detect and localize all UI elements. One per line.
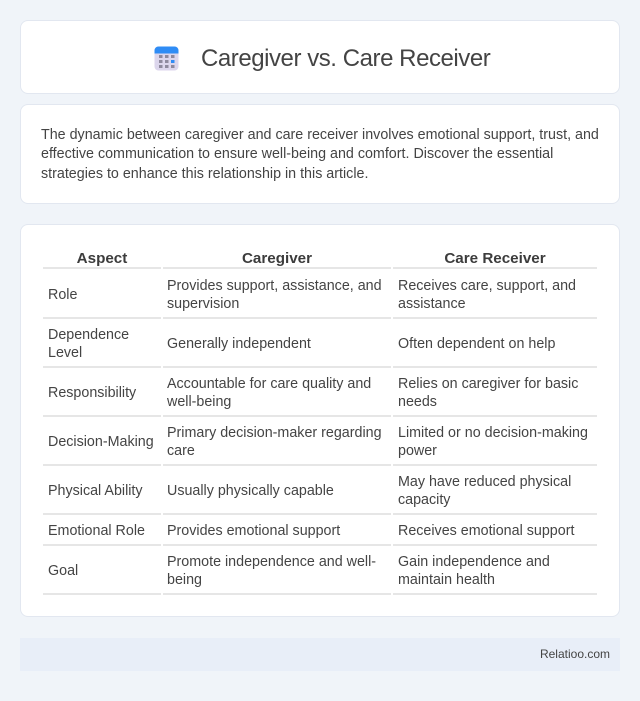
- decision-making: care receiver: [398, 425, 588, 459]
- responsibility: caregiver: well-being: [167, 394, 231, 410]
- footer credit: Relatioo.com: [540, 647, 610, 661]
- decision-making: caregiver: Primary decision-maker regarding: [167, 425, 382, 441]
- decision-making: care receiver: Limited or no decision-making: [398, 425, 588, 441]
- row label: physical ability: Physical Ability: [48, 483, 143, 499]
- decision-making: caregiver: [167, 425, 382, 459]
- row label: responsibility: Responsibility: [48, 385, 136, 401]
- panel: comparison table: [20, 224, 620, 617]
- goal: caregiver: being: [167, 572, 202, 588]
- physical ability: care receiver: May have reduced physical: [398, 474, 571, 490]
- physical ability: caregiver: Usually physically capable: [167, 483, 334, 499]
- decision-making: caregiver: care: [167, 443, 195, 459]
- decision-making: care receiver: power: [398, 443, 437, 459]
- intro text: [41, 127, 599, 182]
- physical ability: care receiver: capacity: [398, 492, 450, 508]
- intro text: The dynamic between caregiver and care receiver involves emotional support, trust, and: [41, 127, 599, 143]
- header: care receiver: Care Receiver: [444, 250, 546, 267]
- goal: care receiver: [398, 554, 550, 588]
- row label: role: Role: [48, 287, 77, 303]
- footer bar: [20, 638, 620, 671]
- icon: calendar: [154, 46, 178, 70]
- intro text: strategies to enhance this relationship in this article.: [41, 166, 368, 182]
- responsibility: care receiver: needs: [398, 394, 437, 410]
- row label: dependence level: Dependence: [48, 327, 129, 343]
- goal: care receiver: Gain independence and: [398, 554, 550, 570]
- dependence: caregiver: Generally independent: [167, 336, 311, 352]
- role: care receiver: [398, 278, 576, 312]
- panel: title header: [20, 20, 620, 94]
- role: care receiver: Receives care, support, and: [398, 278, 576, 294]
- intro text: effective communication to ensure well-being and comfort. Discover the essential: [41, 146, 553, 162]
- row label: goal: Goal: [48, 563, 78, 579]
- row label: emotional role: Emotional Role: [48, 523, 145, 539]
- row label: dependence level: Level: [48, 345, 82, 361]
- role: caregiver: Provides support, assistance, and: [167, 278, 382, 294]
- dependence: care receiver: Often dependent on help: [398, 336, 555, 352]
- physical ability: care receiver: [398, 474, 571, 508]
- header: aspect: Aspect: [77, 250, 127, 267]
- responsibility: care receiver: Relies on caregiver for basic: [398, 376, 578, 392]
- role: caregiver: [167, 278, 382, 312]
- emotional role: care receiver: Receives emotional support: [398, 523, 574, 539]
- title: Caregiver vs. Care Receiver: [201, 45, 490, 72]
- responsibility: caregiver: Accountable for care quality and: [167, 376, 371, 392]
- role: care receiver: assistance: [398, 296, 466, 312]
- responsibility: care receiver: [398, 376, 578, 410]
- header: caregiver: Caregiver: [242, 250, 312, 267]
- row label: decision-making: Decision-Making: [48, 434, 154, 450]
- goal: caregiver: Promote independence and well-: [167, 554, 376, 570]
- emotional role: caregiver: Provides emotional support: [167, 523, 340, 539]
- goal: care receiver: maintain health: [398, 572, 495, 588]
- goal: caregiver: [167, 554, 376, 588]
- panel: introduction: [20, 104, 620, 204]
- role: caregiver: supervision: [167, 296, 239, 312]
- row label: dependence level: [48, 327, 129, 361]
- responsibility: caregiver: [167, 376, 371, 410]
